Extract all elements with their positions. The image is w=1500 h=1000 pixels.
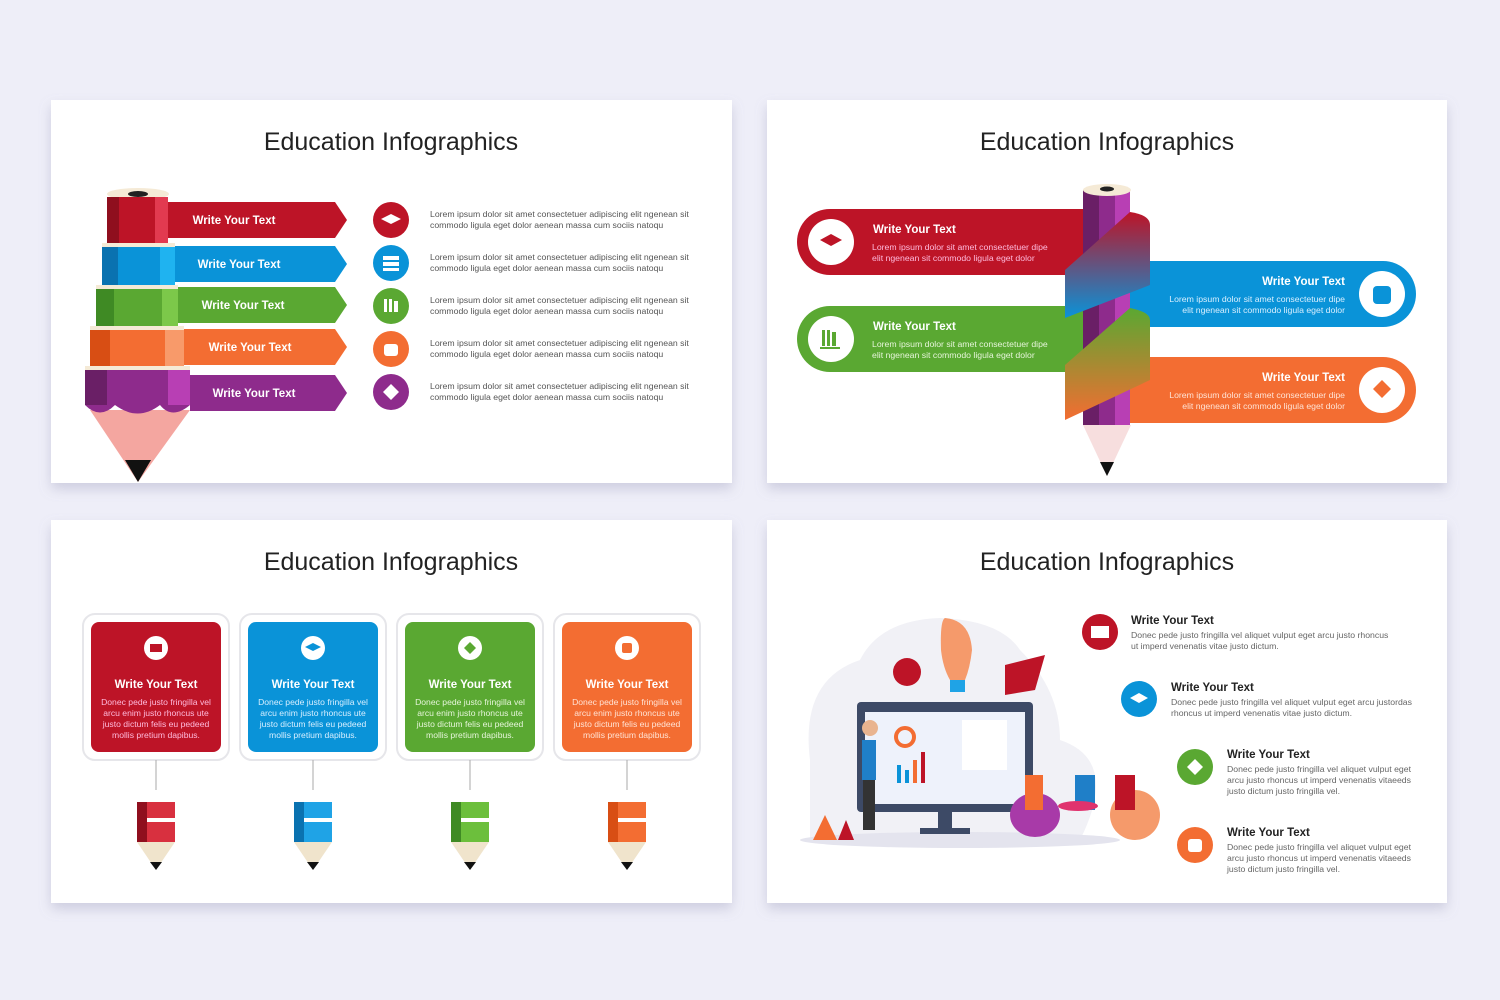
item 4: Write Your Text (1227, 827, 1310, 839)
card: green: arcu enim justo rhoncus ute (417, 708, 523, 718)
card: orange (554, 614, 700, 870)
pill: red: Write Your Text (873, 224, 956, 236)
item 2: Donec pede justo fringilla vel aliquet vulput eget arcu justordas (1171, 697, 1413, 707)
card: red (83, 614, 229, 870)
item 4: arcu justo rhoncus ut imperd venenatis vitaeeds (1227, 853, 1412, 863)
ribbon: green: Write Your Text (202, 300, 285, 312)
card: orange: Donec pede justo fringilla vel (572, 697, 682, 707)
text blocks: Lorem ipsum dolor sit amet consectetuer adipiscing elit ngenean sit (430, 338, 689, 348)
pill: blue: elit ngenean sit commodo ligula eget dolor (1182, 305, 1345, 315)
pill: green (797, 306, 1090, 372)
card: green (397, 614, 543, 870)
panel: top-left pencil ribbons (51, 100, 732, 483)
illustration: classroom (800, 618, 1160, 848)
text blocks: commodo ligula eget dolor aenean massa cum sociis natoqu (430, 263, 663, 273)
ribbon: green (178, 287, 347, 323)
item 1 (1082, 614, 1389, 651)
pill: green: elit ngenean sit commodo ligula eget dolor (872, 350, 1035, 360)
item 3 (1177, 749, 1412, 796)
pill: orange: elit ngenean sit commodo ligula eget dolor (1182, 401, 1345, 411)
text blocks: commodo ligula eget dolor aenean massa cum sociis natoqu (430, 392, 663, 402)
card: blue: mollis pretium dapibus. (269, 730, 357, 740)
card: orange: justo dictum felis eu pedeed (573, 719, 680, 729)
pill: red: elit ngenean sit commodo ligula eget dolor (872, 253, 1035, 263)
item 2 (1121, 681, 1413, 718)
item 3: justo dictum justo fringilla vel. (1226, 786, 1340, 796)
heading: Education Infographics (264, 548, 518, 576)
panel: top-right wrapped pencil (767, 100, 1447, 483)
card: red: arcu enim justo rhoncus ute (103, 708, 209, 718)
pill: blue (1125, 261, 1416, 327)
text blocks: Lorem ipsum dolor sit amet consectetuer adipiscing elit ngenean sit (430, 295, 689, 305)
pill: green: Lorem ipsum dolor sit amet consectetuer dipe (872, 339, 1048, 349)
card: green: Donec pede justo fringilla vel (415, 697, 525, 707)
ribbon: orange: Write Your Text (209, 342, 292, 354)
card: blue: Donec pede justo fringilla vel (258, 697, 368, 707)
pill: red (797, 209, 1090, 275)
item 1: ut imperd venenatis vitae justo dictum. (1131, 641, 1279, 651)
card: blue: arcu enim justo rhoncus ute (260, 708, 366, 718)
card: blue: Write Your Text (272, 679, 355, 691)
pill: orange: Write Your Text (1262, 372, 1345, 384)
pencil stack (85, 188, 190, 482)
ribbon: red: Write Your Text (193, 215, 276, 227)
item 3: Write Your Text (1227, 749, 1310, 761)
pill: green: Write Your Text (873, 321, 956, 333)
pill: orange: Lorem ipsum dolor sit amet consectetuer dipe (1169, 390, 1345, 400)
pencil (1083, 184, 1131, 476)
ribbon: purple (190, 375, 347, 411)
card: blue: justo dictum felis eu pedeed (259, 719, 366, 729)
card: red: Write Your Text (115, 679, 198, 691)
card: orange: arcu enim justo rhoncus ute (574, 708, 680, 718)
text blocks: Lorem ipsum dolor sit amet consectetuer adipiscing elit ngenean sit (430, 252, 689, 262)
text blocks: Lorem ipsum dolor sit amet consectetuer adipiscing elit ngenean sit (430, 381, 689, 391)
ribbon: purple: Write Your Text (213, 388, 296, 400)
spiral ribbon (1065, 212, 1150, 420)
card: red: justo dictum felis eu pedeed (102, 719, 209, 729)
card: orange: Write Your Text (586, 679, 669, 691)
card: red: mollis pretium dapibus. (112, 730, 200, 740)
card: green: Write Your Text (429, 679, 512, 691)
ribbon: orange (184, 329, 347, 365)
pill: blue: Write Your Text (1262, 276, 1345, 288)
heading: Education Infographics (264, 128, 518, 156)
ribbon: blue: Write Your Text (198, 259, 281, 271)
item 1: Donec pede justo fringilla vel aliquet vulput eget arcu justo rhoncus (1131, 630, 1389, 640)
text blocks: commodo ligula eget dolor aenean massa cum sociis natoqu (430, 349, 663, 359)
item 2: rhoncus ut imperd venenatis vitae justo dictum. (1171, 708, 1352, 718)
text blocks (430, 209, 689, 402)
panel: bottom-left cards (51, 520, 732, 903)
item 1: Write Your Text (1131, 615, 1214, 627)
text blocks: Lorem ipsum dolor sit amet consectetuer adipiscing elit ngenean sit (430, 209, 689, 219)
card: green: mollis pretium dapibus. (426, 730, 514, 740)
card: green: justo dictum felis eu pedeed (416, 719, 523, 729)
item 2: Write Your Text (1171, 682, 1254, 694)
panel: bottom-right illustration list (767, 520, 1447, 903)
heading: Education Infographics (980, 128, 1234, 156)
card: blue (240, 614, 386, 870)
pill: red: Lorem ipsum dolor sit amet consectetuer dipe (872, 242, 1048, 252)
ribbon: red (168, 202, 347, 238)
heading: Education Infographics (980, 548, 1234, 576)
card: red: Donec pede justo fringilla vel (101, 697, 211, 707)
item 3: Donec pede justo fringilla vel aliquet vulput eget (1227, 764, 1412, 774)
pill: blue: Lorem ipsum dolor sit amet consectetuer dipe (1169, 294, 1345, 304)
item 4: Donec pede justo fringilla vel aliquet vulput eget (1227, 842, 1412, 852)
item 4 (1177, 827, 1412, 874)
ribbon: blue (175, 246, 347, 282)
text blocks: commodo ligula eget dolor aenean massa cum sociis natoqu (430, 220, 663, 230)
item 3: arcu justo rhoncus ut imperd venenatis vitaeeds (1227, 775, 1412, 785)
item 4: justo dictum justo fringilla vel. (1226, 864, 1340, 874)
pill: orange (1125, 357, 1416, 423)
text blocks: commodo ligula eget dolor aenean massa cum sociis natoqu (430, 306, 663, 316)
icons column (373, 202, 409, 410)
card: orange: mollis pretium dapibus. (583, 730, 671, 740)
